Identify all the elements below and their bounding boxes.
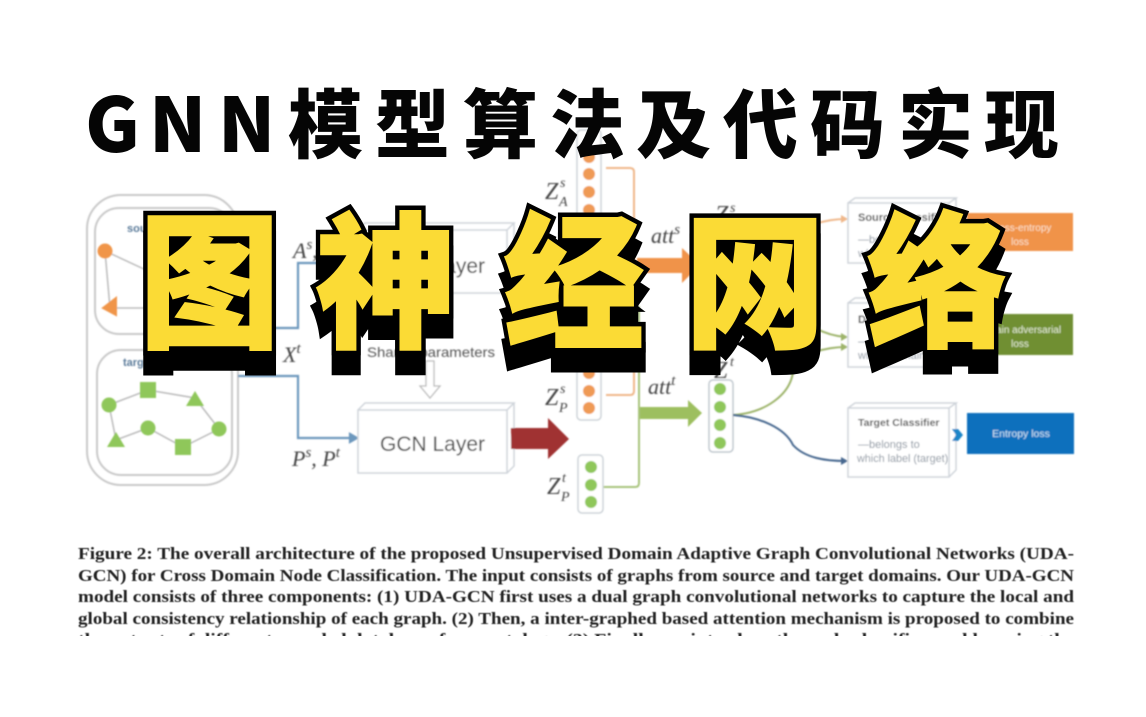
- title shadow: 神: [316, 188, 456, 399]
- domain adversarial loss: [965, 314, 1073, 355]
- cross-entropy loss: loss: [1011, 237, 1029, 248]
- input labels: t: [296, 341, 301, 357]
- caption: Figure 2: The overall architecture of the proposed Unsupervised Domain Adaptive Graph Convolutional Networks (UDA-: [78, 544, 1074, 563]
- title face: [139, 168, 1008, 379]
- attention labels: att: [648, 374, 671, 399]
- title outline: 络: [867, 168, 1008, 379]
- input labels: s: [306, 237, 312, 253]
- title shadow: 络: [867, 188, 1008, 399]
- input labels: A: [293, 238, 306, 263]
- orange feature strip: [577, 130, 601, 420]
- Z labels: A: [558, 195, 568, 210]
- title outline: 经: [504, 168, 644, 379]
- attention labels: t: [671, 373, 676, 389]
- title shadow: 经: [504, 188, 644, 399]
- cross-entropy loss: Cross-entropy: [989, 223, 1051, 234]
- caption: model consists of three components: (1) UDA-GCN first uses a dual graph convolutional networks to capture the local and: [78, 587, 1075, 606]
- Z labels: [545, 176, 736, 505]
- input labels: X: [283, 342, 296, 367]
- input labels: , P: [311, 446, 336, 471]
- title outline: 网: [685, 168, 825, 379]
- input labels: s: [305, 445, 311, 461]
- Z labels: t: [730, 355, 735, 370]
- lower GCN layer: GCN Layer: [380, 433, 485, 456]
- input arrows: [238, 263, 357, 442]
- lower GCN layer: [358, 403, 514, 473]
- title face: 经: [504, 168, 644, 379]
- red arrow: [511, 418, 569, 459]
- title face: 图: [139, 168, 280, 379]
- domain classifier: —belongs to: [858, 336, 920, 348]
- title outline: 神: [316, 168, 456, 379]
- Z labels: Z: [545, 385, 559, 411]
- green feature strip: [578, 455, 603, 513]
- Z labels: s: [560, 176, 566, 191]
- Z labels: s: [730, 201, 736, 216]
- domain classifier: which domain: [857, 350, 925, 362]
- Z labels: t: [562, 471, 567, 486]
- upper GCN layer: [358, 223, 514, 293]
- source graph: [98, 223, 163, 315]
- title shadow: 网: [685, 188, 825, 399]
- source classifier: which label: [857, 248, 912, 260]
- domain classifier: Domain Classifier: [858, 314, 952, 326]
- top title: GNN模型算法及代码实现: [85, 65, 1059, 174]
- title shadow: 图: [139, 188, 280, 399]
- Z labels: Z: [714, 358, 728, 384]
- title outline: [139, 168, 1008, 379]
- Z labels: Z: [545, 179, 559, 205]
- input labels: P: [292, 446, 305, 471]
- Z labels: Z: [547, 474, 561, 500]
- domain adversarial loss: Domain adversarial: [975, 325, 1061, 336]
- attention labels: [648, 222, 680, 399]
- target classifier: [848, 403, 956, 477]
- title face: 络: [867, 168, 1008, 379]
- Z labels: P: [560, 490, 570, 505]
- input labels: [282, 237, 341, 471]
- input labels: ,: [312, 238, 318, 263]
- main title: 图神经网络: [139, 168, 1008, 399]
- shared parameters: Shared parameters: [367, 344, 495, 360]
- connector curves: [733, 215, 848, 465]
- domain classifier: [848, 298, 956, 367]
- green attention arrow: [640, 400, 702, 427]
- target graph: [102, 357, 226, 455]
- orange attention arrow: [637, 248, 700, 283]
- title face: 神: [316, 168, 456, 379]
- target graph: target: [123, 357, 154, 369]
- title outline: 图: [139, 168, 280, 379]
- target classifier: which label (target): [856, 453, 948, 465]
- entropy loss: [967, 413, 1074, 454]
- source classifier: —belongs to: [858, 234, 920, 246]
- domain adversarial loss: loss: [1011, 339, 1029, 350]
- title face: 网: [685, 168, 825, 379]
- attention labels: att: [651, 223, 674, 248]
- Z^t strip: [709, 380, 733, 452]
- cross-entropy loss: [967, 213, 1073, 251]
- input labels: t: [336, 445, 341, 461]
- upper GCN layer: GCN Layer: [380, 255, 485, 278]
- caption: [78, 544, 1075, 649]
- target classifier: —belongs to: [858, 439, 920, 451]
- source classifier: [848, 198, 956, 263]
- attention labels: s: [674, 222, 680, 238]
- Z labels: s: [560, 382, 566, 397]
- architecture diagram: [87, 130, 1074, 513]
- target classifier: Target Classifier: [858, 417, 940, 429]
- Z labels: P: [558, 401, 568, 416]
- caption: global consistency relationship of each graph. (2) Then, a inter-graphed based attention mechanism is proposed to combine: [78, 609, 1074, 628]
- title shadow: [139, 188, 1008, 399]
- chevron: [952, 429, 963, 441]
- source graph: source: [127, 223, 163, 235]
- shared parameters: [367, 344, 495, 398]
- brackets: [603, 168, 639, 487]
- Z labels: Z: [715, 202, 729, 228]
- source classifier: Source Classifier: [858, 212, 949, 224]
- caption: the outputs of different encoded databases from ontology. (3) Finally, we introduce the node classifier, and learning the: [78, 630, 1075, 649]
- entropy loss: Entropy loss: [992, 428, 1050, 440]
- panel: input graphs: [87, 195, 238, 485]
- caption: GCN) for Cross Domain Node Classification. The input consists of graphs from source and target domains. Our UDA-GCN: [78, 566, 1075, 585]
